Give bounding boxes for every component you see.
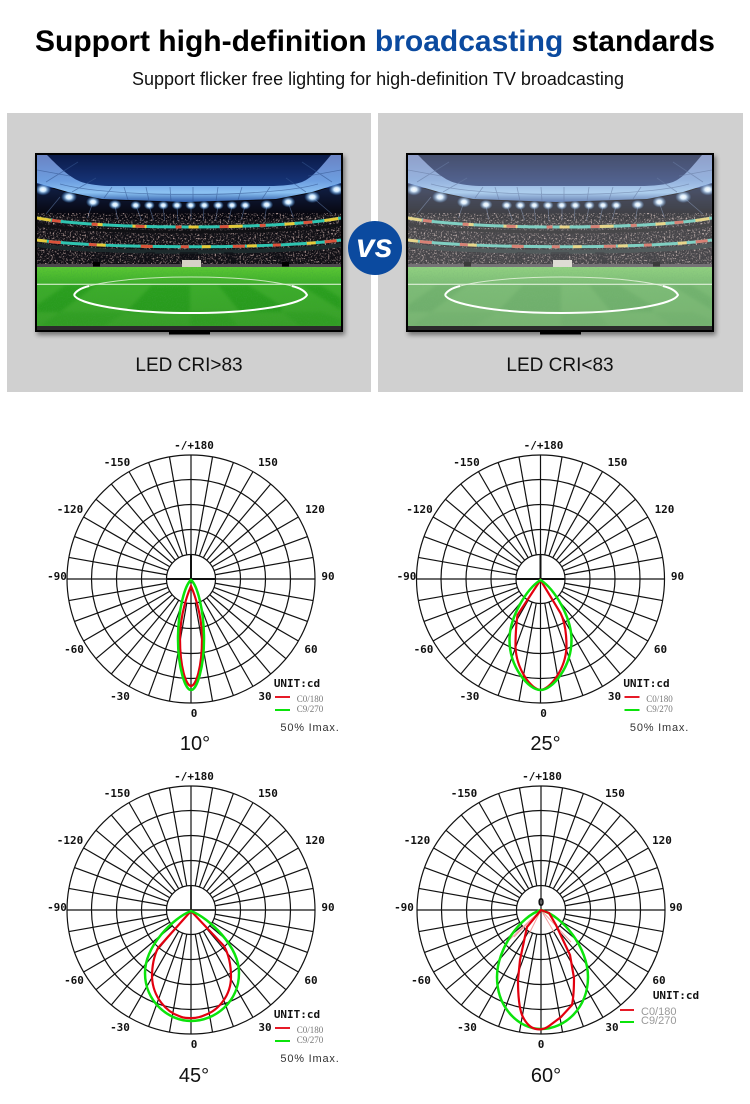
angle labels: -60 [64,974,84,987]
angle labels [397,439,684,720]
angle labels: -150 [104,787,130,800]
panel: LED CRI below 83 [378,113,743,392]
VS badge [348,221,402,275]
angle labels: -60 [411,974,431,987]
curve: C9/270 [145,911,239,1021]
angle labels: -120 [406,503,433,516]
angle labels [47,439,335,720]
angle labels: 150 [608,456,627,469]
angle labels: -90 [394,901,414,914]
polar chart: 10 degree beam [47,439,340,755]
angle labels [394,770,683,1051]
panel: LED CRI above 83 [7,113,371,392]
angle labels: -120 [404,834,430,847]
angle labels: -60 [414,643,433,656]
legend [274,1008,340,1065]
beam angle: 60°: 60° [531,1065,561,1087]
VS badge: vs [356,227,393,264]
angle labels: 0 [538,1038,544,1051]
polar chart: 25 degree beam [397,439,689,755]
polar chart: 60 degree beam [394,770,699,1087]
curve: C0/180 [152,911,231,1018]
angle labels: -90 [397,570,416,583]
angle labels: 30 [605,1021,619,1034]
angle labels: -/+180 [522,770,562,783]
angle labels: 150 [258,787,278,800]
legend: C9/270 [646,704,673,714]
legend: C0/180 [641,1006,676,1018]
angle labels: 30 [258,690,272,703]
angle labels: 90 [669,901,683,914]
curve: C9/270 [178,580,204,690]
angle labels: -150 [104,456,130,469]
angle labels: 120 [652,834,672,847]
angle labels: -/+180 [524,439,563,452]
curve: C0/180 [180,586,202,686]
polar chart: 45 degree beam [47,770,340,1087]
subtitle: Support flicker free lighting for high-definition TV broadcasting [132,69,624,89]
angle labels: 120 [305,834,325,847]
legend: 50% Imax. [280,722,340,734]
title: Support high-definition broadcasting standards [35,25,715,58]
legend: C0/180 [297,1025,324,1035]
angle labels: 60 [304,643,318,656]
angle labels: -/+180 [174,439,214,452]
angle labels: 90 [321,570,335,583]
center zero: 0 [538,896,544,909]
legend: C9/270 [297,704,324,714]
angle labels [47,770,335,1051]
label: LED CRI>83: LED CRI>83 [135,355,243,376]
legend: C9/270 [297,1035,324,1045]
legend: UNIT:cd [274,1008,320,1021]
angle labels: 150 [258,456,278,469]
angle labels: -30 [460,690,479,703]
legend [274,677,340,734]
angle labels: -120 [57,834,83,847]
angle labels: 90 [671,570,684,583]
curve: C0/180 [516,580,566,690]
legend: C9/270 [641,1015,676,1027]
angle labels: -30 [457,1021,477,1034]
legend [620,989,699,1027]
angle labels: -30 [110,1021,130,1034]
angle labels: 120 [655,503,674,516]
angle labels: 0 [540,707,547,720]
angle labels: -60 [64,643,84,656]
legend: UNIT:cd [274,677,320,690]
angle labels: -120 [57,503,83,516]
angle labels: 90 [321,901,335,914]
angle labels: -150 [451,787,477,800]
beam angle: 25°: 25° [530,733,561,755]
angle labels: -/+180 [174,770,214,783]
angle labels: 0 [191,707,197,720]
angle labels: 0 [191,1038,197,1051]
curve: C9/270 [497,910,588,1029]
curve: C9/270 [510,580,572,690]
beam angle: 45°: 45° [179,1065,209,1087]
legend: C0/180 [646,694,673,704]
beam angle: 10°: 10° [180,733,210,755]
legend: UNIT:cd [623,677,670,690]
angle labels: 60 [654,643,667,656]
angle labels: 30 [258,1021,272,1034]
angle labels: 60 [652,974,666,987]
legend: 50% Imax. [280,1053,340,1065]
angle labels: -90 [47,570,67,583]
legend: UNIT:cd [653,989,699,1002]
angle labels: 60 [304,974,318,987]
legend: 50% Imax. [630,722,689,734]
TV: vivid stadium [35,153,345,335]
TV: washed-out stadium [406,153,716,335]
angle labels: 30 [608,690,621,703]
angle labels: -90 [47,901,67,914]
angle labels: 120 [305,503,325,516]
legend [623,677,689,734]
angle labels: 150 [605,787,625,800]
angle labels: -30 [110,690,130,703]
curve: C0/180 [518,910,574,1029]
legend: C0/180 [297,694,324,704]
angle labels: -150 [453,456,480,469]
label: LED CRI<83: LED CRI<83 [506,355,614,376]
